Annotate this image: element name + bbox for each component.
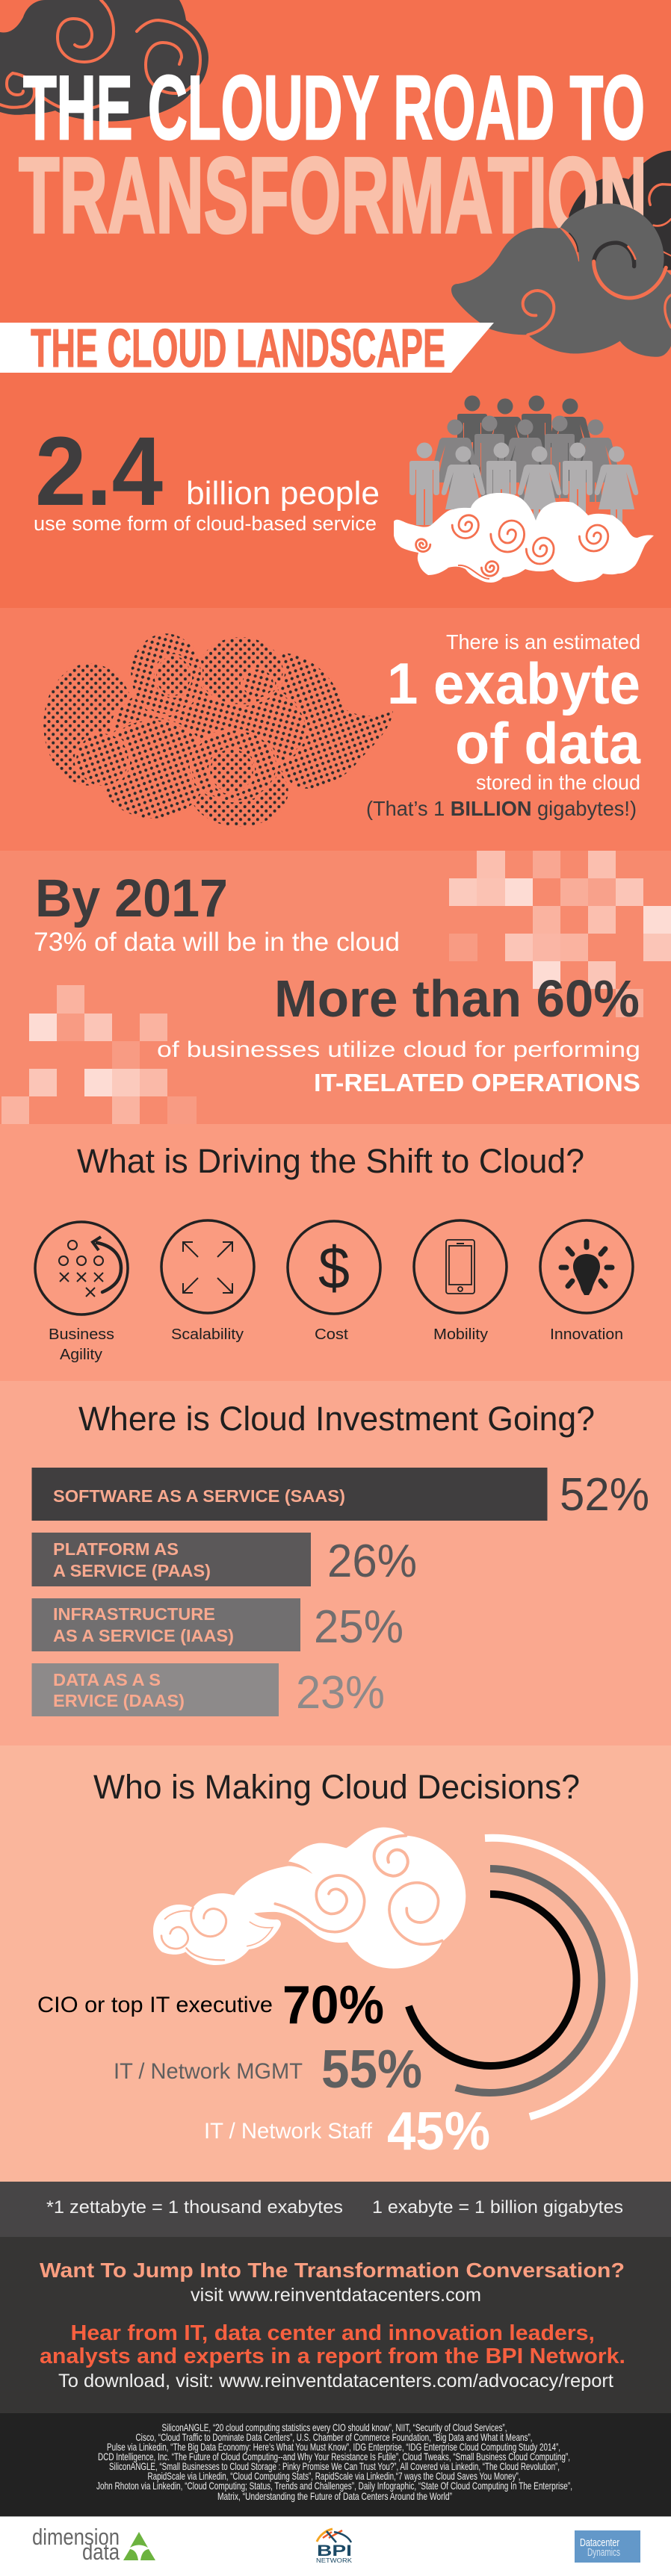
- labels: driver names: Mobility: [433, 1326, 488, 1343]
- panel: sources: [0, 2413, 671, 2516]
- labels: driver names: Scalability: [171, 1326, 244, 1343]
- logo: BPI network: NETWORK: [316, 2557, 353, 2564]
- text: more than 60%: [157, 969, 640, 1096]
- bar: IaaS 25%: 25%: [314, 1601, 403, 1653]
- heading: drivers: What is Driving the Shift to Cloud?: [77, 1142, 584, 1180]
- bar: IaaS 25%: AS A SERVICE (IAAS): [53, 1626, 234, 1645]
- bar: DaaS 23%: 23%: [296, 1667, 385, 1719]
- stat: IT network staff 45%: [204, 2102, 490, 2161]
- bar: IaaS 25%: INFRASTRUCTURE: [53, 1604, 215, 1624]
- icon: white swirl cloud: [153, 1828, 466, 1969]
- bar: PaaS 26%: 26%: [327, 1536, 417, 1587]
- labels: driver names: Agility: [60, 1347, 102, 1363]
- logo: dimension data: [32, 2524, 155, 2565]
- title: [19, 57, 647, 255]
- icon: dotted cloud: [43, 633, 394, 828]
- bar: SaaS 52%: SOFTWARE AS A SERVICE (SAAS): [53, 1486, 345, 1506]
- panel: footnote units: [0, 2182, 671, 2237]
- bar: SaaS 52%: [31, 1468, 649, 1521]
- stat: 2.4 billion people: 2.4: [35, 416, 163, 526]
- labels: driver names: Cost: [315, 1326, 348, 1343]
- text: exabyte stat: 1 exabyte: [387, 651, 640, 716]
- bar: DaaS 23%: ERVICE (DAAS): [53, 1691, 185, 1710]
- panel: footnote units: 1 exabyte = 1 billion gigabytes: [372, 2197, 623, 2217]
- text: by 2017: [34, 869, 400, 957]
- logo: datacenter dynamics: Dynamics: [587, 2546, 620, 2559]
- icon: crowd of people on cloud: [394, 396, 654, 583]
- text: more than 60%: More than 60%: [274, 969, 640, 1028]
- icon: innovation: [540, 1220, 633, 1313]
- icon: dark cloud behind title: [566, 151, 671, 270]
- panel: cloud investment: [0, 1381, 671, 1745]
- text: by 2017: 73% of data will be in the cloud: [34, 928, 400, 957]
- icon: mobility: [414, 1220, 507, 1313]
- bar: DaaS 23%: DATA AS A S: [53, 1670, 161, 1689]
- stat: 2.4 billion people: [34, 416, 380, 535]
- stat: 2.4 billion people: use some form of cloud-based service: [34, 512, 377, 535]
- panel: call to action: Hear from IT, data center and innovation leaders,: [70, 2321, 595, 2345]
- stat: IT network staff 45%: 45%: [387, 2102, 490, 2161]
- stat: CIO 70%: 70%: [282, 1976, 384, 2035]
- text: exabyte stat: (That’s 1 BILLION gigabytes!): [366, 797, 637, 820]
- panel: call to action: Want To Jump Into The Transformation Conversation?: [40, 2259, 625, 2282]
- text: exabyte stat: of data: [455, 710, 641, 776]
- logo: datacenter dynamics: [575, 2530, 640, 2563]
- panel: title and cloud landscape: [0, 0, 671, 608]
- heading: investment: Where is Cloud Investment Going?: [78, 1400, 595, 1438]
- bar: PaaS 26%: A SERVICE (PAAS): [53, 1561, 211, 1580]
- panel: call to action: [0, 2237, 671, 2413]
- panel: cloud decisions: [0, 1745, 671, 2182]
- text: exabyte stat: stored in the cloud: [476, 771, 640, 794]
- panel: sources: Matrix, “Understanding the Future of Data Centers Around the World”: [217, 2490, 452, 2502]
- bar: IaaS 25%: [31, 1598, 403, 1653]
- panel: 1 exabyte of data: [0, 608, 671, 851]
- panel: by 2017: [0, 851, 671, 1124]
- logo: dimension data: dimension: [32, 2524, 120, 2550]
- panel: sponsor logos: [0, 2516, 671, 2576]
- labels: driver names: [49, 1326, 623, 1363]
- stat: CIO 70%: [37, 1976, 384, 2035]
- stat: IT network management 55%: 55%: [321, 2040, 422, 2099]
- stat: IT network management 55%: [114, 2040, 422, 2099]
- stat: IT network management 55%: IT / Network MGMT: [114, 2059, 303, 2084]
- icon: dark cloud top left: [0, 0, 208, 122]
- logo: datacenter dynamics: Datacenter: [580, 2536, 619, 2549]
- logo: dimension data: data: [82, 2539, 120, 2565]
- panel: sources: SiliconANGLE, “20 cloud computing statistics every CIO should know”, NIIT, “Security of Cloud Services”,: [161, 2421, 507, 2433]
- stat: CIO 70%: CIO or top IT executive: [37, 1993, 273, 2017]
- banner: the cloud landscape: [0, 319, 494, 379]
- text: exabyte stat: [366, 630, 641, 820]
- labels: driver names: Business: [49, 1326, 114, 1343]
- bar: SaaS 52%: 52%: [560, 1469, 649, 1521]
- text: exabyte stat: There is an estimated: [446, 630, 640, 654]
- panel: call to action: To download, visit: www.reinventdatacenters.com/advocacy/report: [58, 2371, 613, 2392]
- icon: cost: [288, 1221, 380, 1314]
- panel: call to action: visit www.reinventdatacenters.com: [191, 2285, 481, 2306]
- text: more than 60%: of businesses utilize cloud for performing: [157, 1037, 640, 1062]
- labels: driver names: Innovation: [550, 1326, 623, 1343]
- bar: DaaS 23%: [31, 1663, 385, 1719]
- logo: BPI network: [316, 2529, 353, 2564]
- panel: call to action: analysts and experts in a report from the BPI Network.: [40, 2344, 625, 2368]
- panel: footnote units: *1 zettabyte = 1 thousand exabytes: [46, 2197, 343, 2217]
- panel: sources: RapidScale via Linkedin, “Cloud Computing Stats”, RapidScale via Linkedin,“7 ways the Cloud Saves You Money”,: [148, 2470, 520, 2482]
- icon: cost: $: [318, 1235, 350, 1301]
- pattern: squares bottom left: [1, 985, 197, 1124]
- icon: scalability: [161, 1220, 254, 1313]
- panel: drivers of the shift: [0, 1124, 671, 1381]
- stat: 2.4 billion people: billion people: [186, 475, 380, 512]
- icon: gray cloud right: [451, 203, 671, 357]
- chart: concentric arcs: [409, 1838, 634, 2117]
- heading: decisions: Who is Making Cloud Decisions?: [93, 1768, 580, 1806]
- stat: IT network staff 45%: IT / Network Staff: [204, 2119, 373, 2144]
- pattern: squares top right: [449, 851, 671, 1017]
- bar: PaaS 26%: [31, 1533, 417, 1587]
- logo: BPI network: BPI: [317, 2542, 352, 2560]
- bar: PaaS 26%: PLATFORM AS: [53, 1539, 179, 1559]
- icon: business agility: [35, 1222, 128, 1315]
- text: by 2017: By 2017: [35, 869, 228, 928]
- text: more than 60%: IT-RELATED OPERATIONS: [314, 1069, 640, 1096]
